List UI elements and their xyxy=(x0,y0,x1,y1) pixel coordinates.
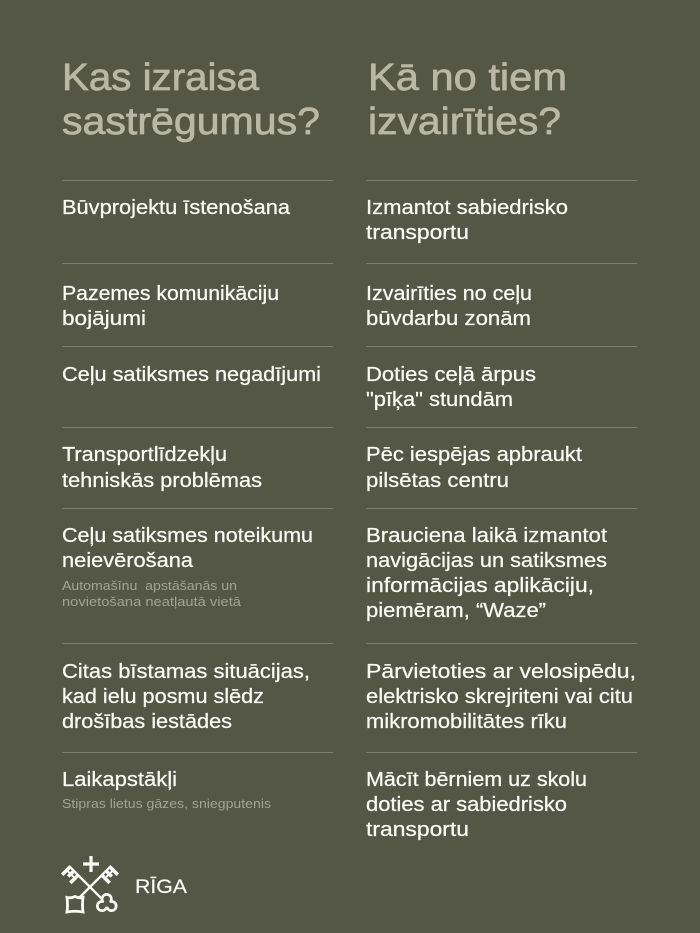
cause: vehicle problems xyxy=(62,444,262,492)
tip: navigation apps: informācijas aplikāciju, xyxy=(366,575,594,597)
tip: public transport: transportu xyxy=(366,222,469,244)
icon: crossed keys xyxy=(61,865,119,912)
tip: children to school xyxy=(366,769,587,841)
cause: traffic rule violations: Ceļu satiksmes noteikumu xyxy=(62,525,313,547)
heading: avoidance: izvairīties? xyxy=(368,101,561,143)
logo wordmark: RĪGA xyxy=(135,877,187,898)
logo: Riga crossed keys xyxy=(61,856,187,912)
tip: bypass city centre: Pēc iespējas apbraukt xyxy=(366,444,582,466)
note: rain and snow: Stipras lietus gāzes, sniegputenis xyxy=(62,796,272,811)
heading: avoidance xyxy=(368,57,567,143)
heading: avoidance: Kā no tiem xyxy=(368,57,567,99)
tip: bypass city centre xyxy=(366,444,582,492)
tip: avoid roadworks: Izvairīties no ceļu xyxy=(366,283,532,305)
cause: dangerous situations: Citas bīstamas situācijas, xyxy=(62,661,310,683)
cause: underground utilities xyxy=(62,283,279,330)
tip: micromobility: Pārvietoties ar velosipēdu, xyxy=(366,661,636,683)
note: illegal parking xyxy=(62,578,242,609)
tip: navigation apps: navigācijas un satiksmes xyxy=(366,550,607,572)
cause: construction: Būvprojektu īstenošana xyxy=(62,197,291,219)
cause: dangerous situations: drošības iestādes xyxy=(62,711,232,733)
tip: bypass city centre: pilsētas centru xyxy=(366,470,509,492)
tip: public transport: Izmantot sabiedrisko xyxy=(366,197,568,219)
tip: avoid roadworks xyxy=(366,283,532,330)
cause: weather: Laikapstākļi xyxy=(62,769,177,791)
cause: accidents: Ceļu satiksmes negadījumi xyxy=(62,364,321,386)
cause: dangerous situations xyxy=(62,661,310,733)
heading: causes: Kas izraisa xyxy=(62,57,260,99)
tip: micromobility: mikromobilitātes rīku xyxy=(366,711,567,733)
tip: off-peak travel xyxy=(366,364,536,411)
heading: causes xyxy=(62,57,320,143)
cause: vehicle problems: Transportlīdzekļu xyxy=(62,444,227,466)
cause: underground utilities: bojājumi xyxy=(62,308,146,330)
heading: causes: sastrēgumus? xyxy=(62,101,320,143)
cause: dangerous situations: kad ielu posmu slēdz xyxy=(62,686,264,708)
tip: micromobility xyxy=(366,661,636,733)
cause: vehicle problems: tehniskās problēmas xyxy=(62,470,262,492)
tip: off-peak travel: Doties ceļā ārpus xyxy=(366,364,536,386)
note: illegal parking: Automašīnu apstāšanās un xyxy=(62,578,237,593)
tip: public transport xyxy=(366,197,568,244)
cause: weather xyxy=(62,769,272,811)
tip: micromobility: elektrisko skrejriteni vai citu xyxy=(366,686,633,708)
note: illegal parking: novietošana neatļautā vietā xyxy=(62,594,242,609)
tip: children to school: transportu xyxy=(366,819,469,841)
tip: navigation apps: piemēram, “Waze” xyxy=(366,600,546,622)
tip: children to school: Mācīt bērniem uz skolu xyxy=(366,769,587,791)
tip: off-peak travel: "pīķa" stundām xyxy=(366,389,513,411)
tip: navigation apps xyxy=(366,525,607,622)
cause: traffic rule violations xyxy=(62,525,313,609)
tip: children to school: doties ar sabiedrisko xyxy=(366,794,567,816)
tip: navigation apps: Brauciena laikā izmantot xyxy=(366,525,607,547)
cause: underground utilities: Pazemes komunikāciju xyxy=(62,283,279,305)
tip: avoid roadworks: būvdarbu zonām xyxy=(366,308,531,330)
cause: traffic rule violations: neievērošana xyxy=(62,550,194,572)
icon: cross xyxy=(83,856,99,872)
